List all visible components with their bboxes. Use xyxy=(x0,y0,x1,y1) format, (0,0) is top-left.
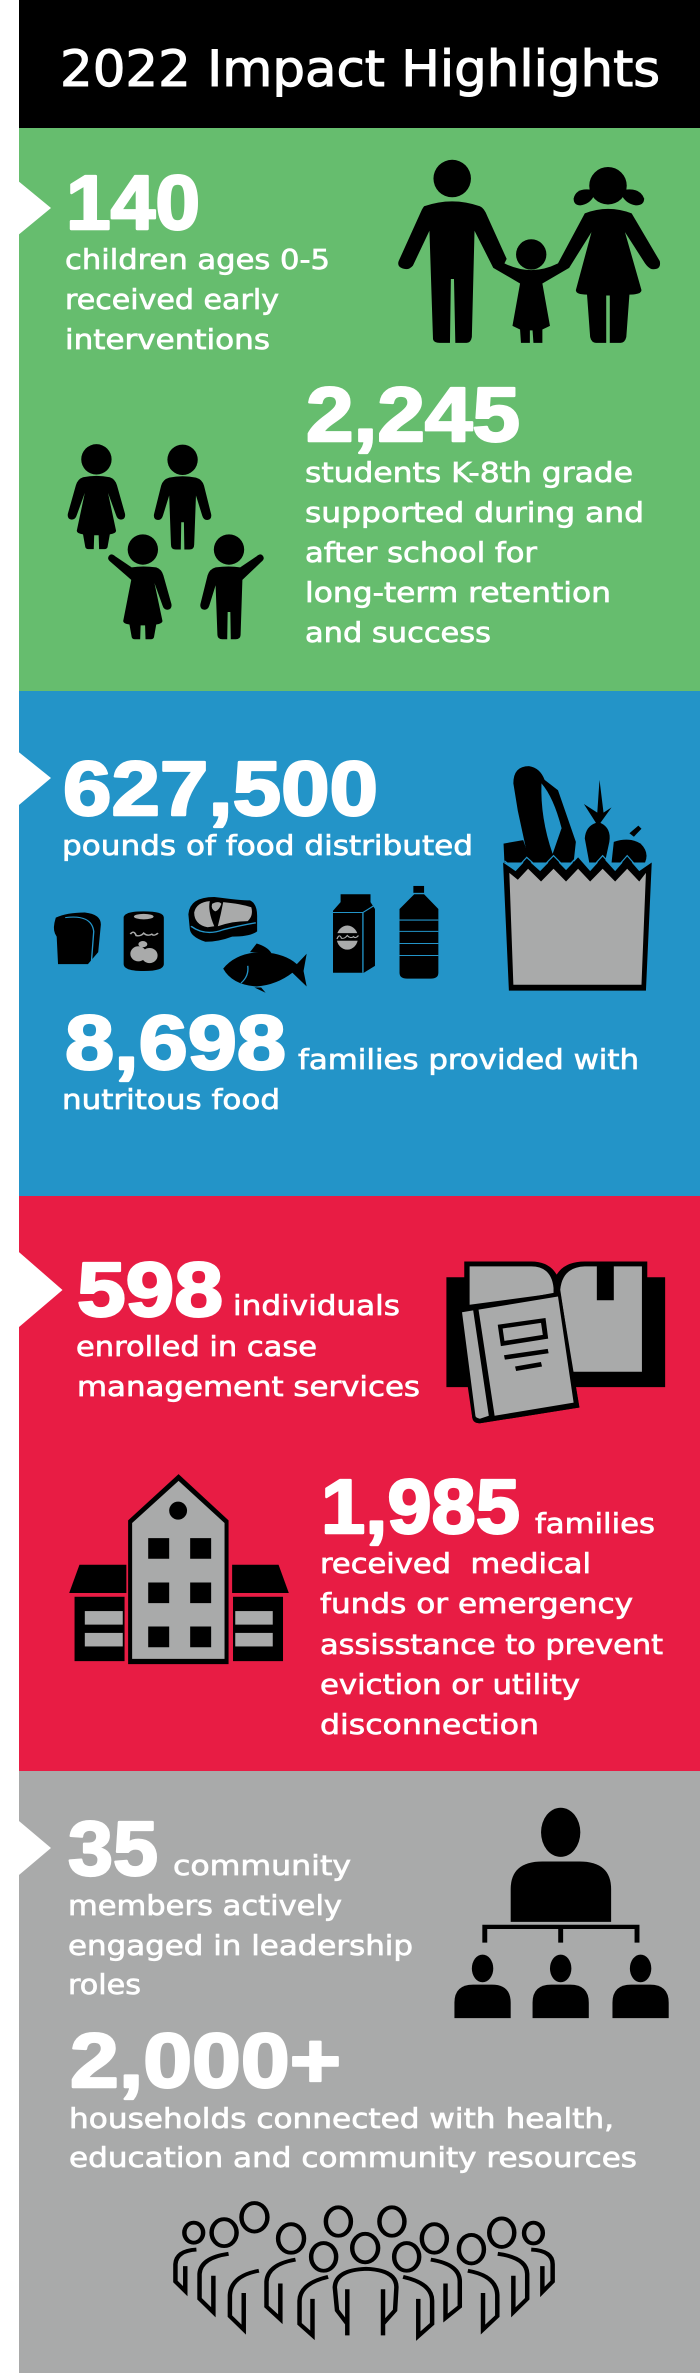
stat: 2,245 students: long-term retention xyxy=(305,577,611,609)
icon: four children xyxy=(68,444,264,639)
stat: 598 individuals: individuals xyxy=(233,1290,400,1322)
icon: apartment building xyxy=(69,1474,289,1664)
stat: 1,985 families: disconnection xyxy=(320,1709,539,1741)
stat: 140 children: children ages 0-5 xyxy=(65,244,330,276)
stat: 35 community members: roles xyxy=(68,1969,141,2001)
stat: 140 children xyxy=(65,160,330,356)
stat: 2,245 students: supported during and xyxy=(305,497,644,529)
stat: 1,985 families: eviction or utility xyxy=(320,1669,580,1701)
stat: 8,698 families: families provided with xyxy=(298,1044,639,1076)
stat: 140 children: received early xyxy=(65,284,279,316)
stat: 35 community members: community xyxy=(173,1850,351,1882)
stat: 35 community members: engaged in leadership xyxy=(68,1930,413,1962)
stat: 8,698 families: nutritous food xyxy=(62,1084,280,1116)
panel: grey community leadership xyxy=(0,1771,700,2373)
stat: 1,985 families: received medical xyxy=(320,1548,591,1580)
stat: 140 children: 140 xyxy=(66,160,200,246)
icon: family holding hands xyxy=(398,160,660,343)
stat: 627,500 pounds: pounds of food distributed xyxy=(62,830,473,862)
icon: bread xyxy=(54,912,101,964)
header banner xyxy=(19,0,700,128)
stat: 2,245 students: students K-8th grade xyxy=(305,457,633,489)
icon: leader org chart xyxy=(454,1808,669,2018)
icon: milk carton xyxy=(333,894,375,973)
icon: water bottle xyxy=(400,886,438,979)
title: 2022 Impact Highlights xyxy=(60,40,660,98)
panel: blue food distribution xyxy=(0,691,700,1196)
stat: 8,698 families xyxy=(62,1000,639,1116)
arrow: green panel marker xyxy=(0,166,51,250)
stat: 2,245 students: after school for xyxy=(305,537,538,569)
stat: 1,985 families: funds or emergency xyxy=(320,1588,633,1620)
icon: can xyxy=(124,911,164,971)
stat: 1,985 families: 1,985 xyxy=(321,1464,520,1550)
stat: 140 children: interventions xyxy=(65,324,270,356)
stat: 8,698 families: 8,698 xyxy=(65,1000,286,1086)
stat: 1,985 families: assisstance to prevent xyxy=(320,1629,663,1661)
icon: food items xyxy=(54,886,438,993)
stat: 35 community members: 35 xyxy=(68,1806,158,1892)
stat: 35 community members xyxy=(68,1806,413,2001)
icon: crowd of people xyxy=(175,2203,553,2336)
icon: open books xyxy=(446,1261,665,1423)
stat: 2,245 students: and success xyxy=(305,617,491,649)
icon: steak xyxy=(188,897,257,942)
arrow: blue panel marker xyxy=(0,737,51,821)
panel: green children and students xyxy=(0,128,700,691)
stat: 627,500 pounds: 627,500 xyxy=(63,746,378,832)
stat: 598 individuals: enrolled in case xyxy=(76,1331,317,1363)
stat: 1,985 families: families xyxy=(535,1508,655,1540)
icon: fish xyxy=(223,943,307,993)
stat: 1,985 families xyxy=(320,1464,663,1741)
arrow: red panel marker xyxy=(12,1246,62,1333)
stat: 2,000+ households: education and community resources xyxy=(69,2142,637,2174)
stat: 2,000+ households: 2,000+ xyxy=(70,2018,341,2104)
stat: 2,000+ households: households connected with health, xyxy=(69,2103,614,2135)
arrow: grey panel marker xyxy=(0,1805,51,1891)
stat: 2,245 students xyxy=(305,372,644,649)
stat: 598 individuals: management services xyxy=(77,1371,420,1403)
stat: 627,500 pounds xyxy=(62,746,473,862)
panel: red case management and assistance xyxy=(12,1196,700,1771)
stat: 598 individuals: 598 xyxy=(77,1247,223,1333)
stat: 2,000+ households xyxy=(69,2018,637,2174)
icon: grocery bag xyxy=(503,766,652,991)
stat: 598 individuals xyxy=(76,1247,420,1403)
stat: 2,245 students: 2,245 xyxy=(306,372,520,458)
stat: 35 community members: members actively xyxy=(68,1890,342,1922)
